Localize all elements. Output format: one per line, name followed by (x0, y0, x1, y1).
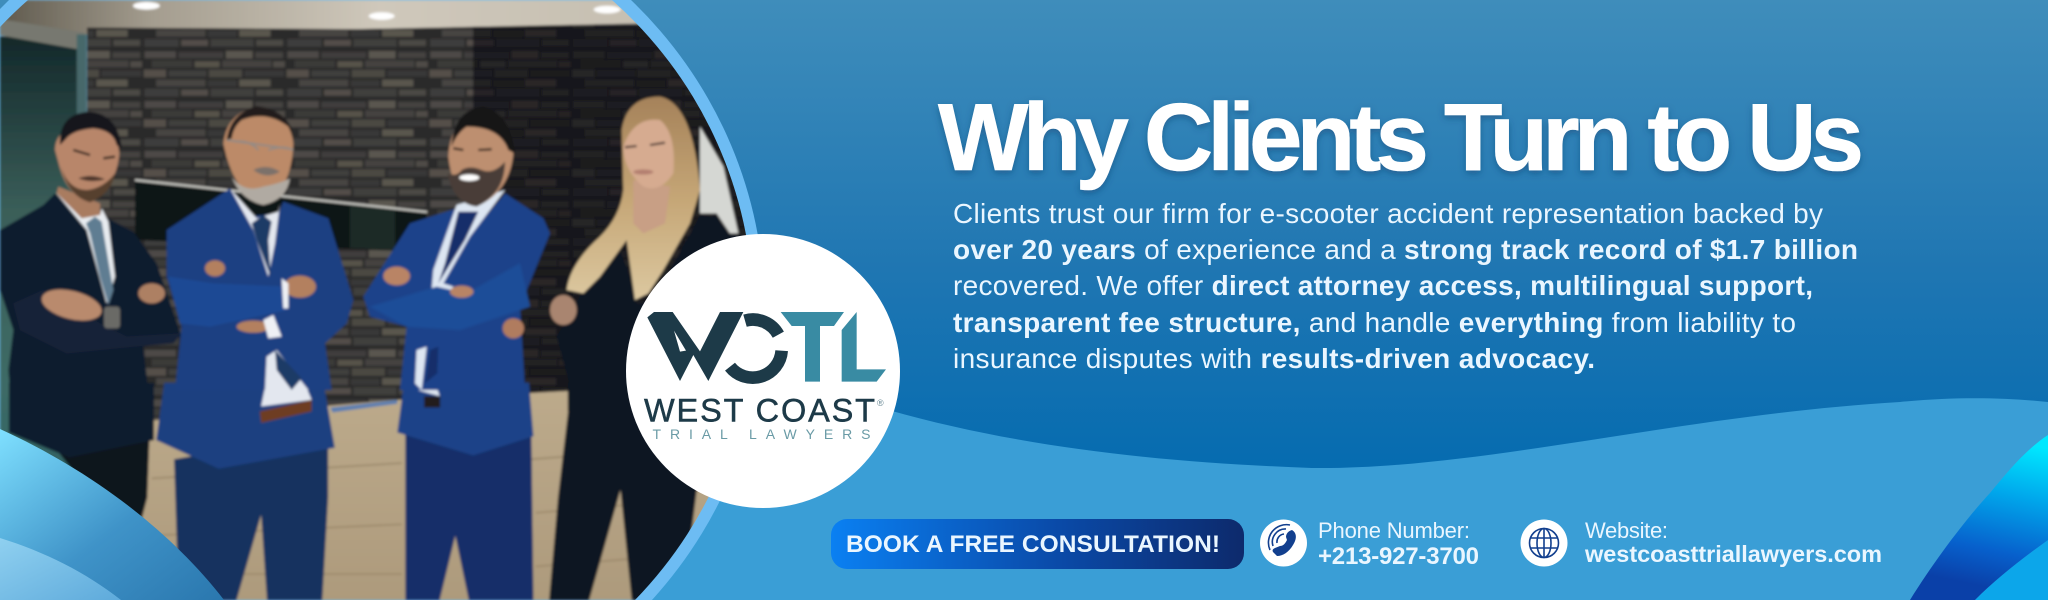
description paragraph: transparent fee structure, and handle everything from liability to (953, 307, 1796, 338)
phone details (1318, 518, 1479, 570)
website details: westcoasttriallawyers.com (1584, 541, 1882, 567)
stone wall (87, 23, 759, 429)
floor (140, 388, 709, 600)
lower wave panel (600, 395, 2048, 600)
title: Why Clients Turn to Us (938, 84, 1864, 191)
glass panel (0, 19, 87, 534)
description paragraph: over 20 years of experience and a strong track record of $1.7 billion (953, 234, 1858, 265)
bottom-left wave (0, 429, 224, 600)
icon: phone (1260, 520, 1307, 566)
person 3: upper body (363, 107, 550, 390)
logo mark WCTL (647, 312, 886, 382)
photo ring (0, 0, 765, 600)
dark window band (135, 180, 427, 252)
website details: Website: (1585, 518, 1668, 543)
logo wordmark: WEST COAST (644, 392, 875, 428)
description paragraph: recovered. We offer direct attorney access, multilingual support, (953, 270, 1813, 301)
website details (1584, 518, 1882, 567)
icon: globe (1520, 520, 1568, 566)
call-to-action button (831, 519, 1244, 569)
person 1: upper body (0, 112, 182, 390)
person 4: upper body (550, 97, 750, 390)
logo registered mark: ® (877, 398, 884, 408)
person 1: lower body (9, 383, 154, 528)
person 2: lower body (156, 383, 335, 600)
call-to-action button: BOOK A FREE CONSULTATION! (846, 531, 1220, 558)
logo tagline: TRIAL LAWYERS (652, 426, 870, 442)
person 2: upper body (167, 106, 353, 390)
photo: four attorneys in the office lobby (0, 0, 759, 600)
logo badge: West Coast Trial Lawyers (626, 234, 900, 508)
accent: bottom-right corner shape (1910, 435, 2048, 600)
person 3: lower body (397, 383, 533, 600)
description paragraph: insurance disputes with results-driven advocacy. (953, 343, 1595, 374)
description paragraph (953, 198, 1858, 374)
phone details: Phone Number: (1318, 518, 1470, 543)
person 4: lower body (548, 382, 698, 600)
phone details: +213-927-3700 (1318, 543, 1479, 570)
description paragraph: Clients trust our firm for e-scooter accident representation backed by (953, 198, 1823, 229)
ceiling (5, 0, 639, 36)
